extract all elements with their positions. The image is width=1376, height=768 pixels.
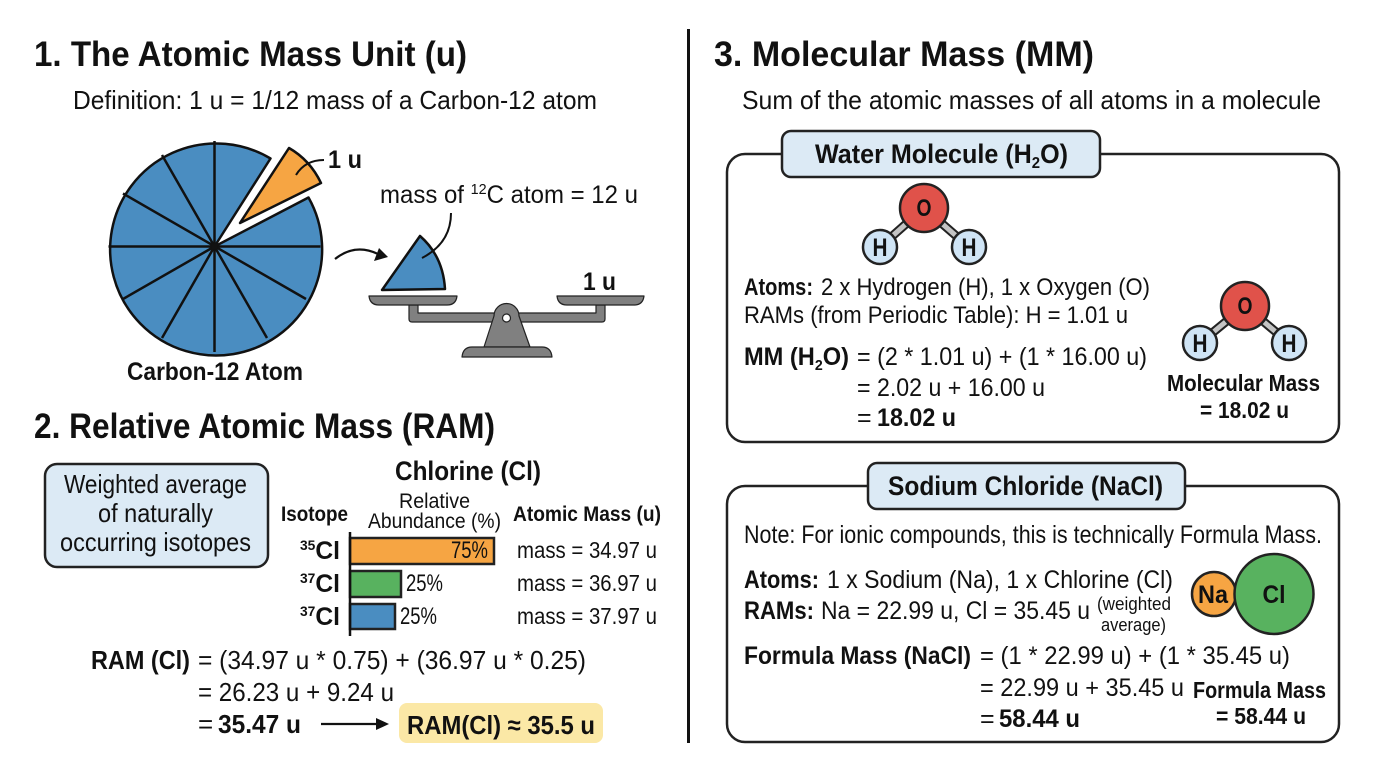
arrow: to result [321, 718, 389, 730]
callout: weighted average: occurring isotopes [60, 527, 251, 557]
icon: slice on scale [382, 236, 445, 290]
formula: molecular mass of water: = 2.02 u + 16.00 u [857, 374, 1045, 402]
leader line: mass label [422, 213, 451, 258]
callout: RAM result: RAM(Cl) ≈ 35.5 u [407, 710, 595, 740]
formula: formula mass of NaCl [744, 642, 1290, 733]
icon: water molecule right: H [1192, 330, 1208, 358]
leader line: 1 u [296, 160, 324, 175]
chart: carbon-12 pie [108, 141, 322, 355]
panel heading: NaCl: Sodium Chloride (NaCl) [888, 471, 1163, 501]
heading: Chlorine: Chlorine (Cl) [395, 456, 541, 486]
panel heading: water [782, 131, 1100, 177]
formula: molecular mass of water: 18.02 u [877, 404, 956, 432]
callout: weighted average: Weighted average [64, 469, 247, 499]
text: atoms and RAMs: 2 x Hydrogen (H), 1 x Oxygen (O) [821, 274, 1150, 301]
text: atoms and RAMs: RAMs (from Periodic Table): H = 1.01 u [744, 302, 1128, 329]
text: atoms and RAMs: RAMs: [744, 597, 814, 625]
text: atoms and RAMs: Atoms: [744, 566, 819, 594]
icon: NaCl ions: Na [1198, 581, 1229, 609]
heading: section 1: 1. The Atomic Mass Unit (u) [34, 35, 467, 74]
text: atoms and RAMs: Na = 22.99 u, Cl = 35.45 u [821, 597, 1090, 625]
formula: RAM calculation: 35.47 u [218, 709, 301, 739]
icon: water molecule right: H [1282, 330, 1296, 358]
panel heading: water: O) [1040, 139, 1068, 169]
bar chart: isotope abundance: 25% [406, 570, 443, 597]
text: atoms and RAMs: 1 x Sodium (Na), 1 x Chlorine (Cl) [827, 566, 1173, 594]
label: molecular mass result: = 18.02 u [1200, 397, 1289, 423]
formula: formula mass of NaCl: = (1 * 22.99 u) + (1 * 35.45 u) [980, 642, 1290, 670]
column header: relative abundance: Relative [399, 490, 470, 513]
panel heading: water: Water Molecule (H [815, 139, 1048, 169]
atomic mass values: mass = 36.97 u [517, 570, 657, 596]
formula: molecular mass of water: O) [823, 343, 849, 371]
formula: formula mass of NaCl: = 22.99 u + 35.45 u [980, 674, 1184, 702]
bar chart: isotope abundance: 75% [451, 537, 488, 564]
callout: weighted average [45, 464, 268, 567]
subtitle text: Sum of the atomic masses of all atoms in a molecule [742, 85, 1321, 115]
icon: water molecule top [863, 184, 986, 264]
callout: RAM result [399, 703, 603, 743]
heading: section 2: 2. Relative Atomic Mass (RAM) [34, 407, 495, 446]
panel: sodium chloride [727, 463, 1339, 742]
icon: NaCl ions: Cl [1262, 581, 1286, 609]
formula: RAM calculation: RAM (Cl) [91, 645, 190, 675]
label: formula mass result: Formula Mass [1193, 677, 1326, 703]
isotope labels: Cl [315, 537, 340, 565]
isotope labels: 37 [300, 603, 316, 619]
isotope labels: Cl [315, 603, 340, 631]
panel heading: NaCl [868, 463, 1185, 509]
formula: molecular mass of water [744, 343, 1147, 432]
panel: water molecule [727, 131, 1339, 442]
label: mass of carbon-12: 12 [471, 181, 487, 198]
callout: weighted average: of naturally [98, 498, 213, 528]
isotope labels [300, 537, 340, 631]
formula: RAM calculation: = (34.97 u * 0.75) + (36.97 u * 0.25) [198, 645, 586, 675]
column header: relative abundance: Abundance (%) [368, 510, 501, 533]
text: atoms and RAMs [744, 274, 1150, 329]
text: atoms and RAMs: Atoms: [744, 274, 813, 301]
formula: formula mass of NaCl: Formula Mass (NaCl) [744, 642, 971, 670]
label: 1 u on slice: 1 u [328, 146, 362, 174]
icon: water molecule top: O [916, 195, 932, 222]
isotope labels: 35 [300, 537, 316, 553]
formula: RAM calculation: = 26.23 u + 9.24 u [198, 677, 394, 707]
formula: molecular mass of water: 2 [815, 357, 823, 374]
formula: molecular mass of water: = (2 * 1.01 u) + (1 * 16.00 u) [857, 343, 1147, 371]
arrow: slice to scale [335, 248, 388, 261]
column header: atomic mass: Atomic Mass (u) [513, 503, 661, 526]
label: molecular mass result [1167, 370, 1320, 423]
panel heading: water: 2 [1032, 155, 1040, 172]
heading: section 3: 3. Molecular Mass (MM) [714, 35, 1094, 74]
label: formula mass result [1193, 677, 1326, 729]
atomic mass values [517, 537, 657, 629]
formula: RAM calculation [91, 645, 586, 739]
icon: water molecule right: O [1238, 293, 1252, 320]
isotope labels: 37 [300, 570, 316, 586]
icon: water molecule top: H [872, 234, 888, 262]
definition text: Definition: 1 u = 1/12 mass of a Carbon-12 atom [73, 85, 597, 115]
isotope labels: Cl [315, 570, 340, 598]
bar chart: isotope abundance [350, 532, 494, 636]
icon: water molecule right [1183, 282, 1306, 360]
column header: relative abundance [368, 490, 501, 533]
label: mass of carbon-12: C atom = 12 u [487, 181, 638, 209]
label: molecular mass result: Molecular Mass [1167, 370, 1320, 396]
formula: formula mass of NaCl: = [980, 705, 995, 733]
formula: RAM calculation: = [198, 709, 213, 739]
label: Carbon-12 Atom: Carbon-12 Atom [127, 358, 303, 386]
label: 1 u on scale: 1 u [583, 268, 616, 296]
column header: isotope: Isotope [281, 503, 348, 526]
atomic mass values: mass = 37.97 u [517, 603, 657, 629]
formula: formula mass of NaCl: 58.44 u [999, 705, 1080, 733]
label: formula mass result: = 58.44 u [1216, 703, 1306, 729]
text: atoms and RAMs: average) [1101, 615, 1166, 635]
label: mass of carbon-12: mass of [380, 181, 468, 209]
icon: balance scale [369, 296, 644, 357]
text: atoms and RAMs [744, 566, 1173, 635]
formula: molecular mass of water: = [857, 404, 872, 432]
formula: molecular mass of water: MM (H [744, 343, 819, 371]
text: atoms and RAMs: (weighted [1097, 594, 1171, 614]
icon: orange 1 u slice [240, 148, 321, 223]
atomic mass values: mass = 34.97 u [517, 537, 657, 563]
bar chart: isotope abundance: 25% [400, 603, 437, 630]
icon: NaCl ions [1192, 554, 1314, 634]
divider [687, 29, 690, 743]
icon: water molecule top: H [962, 234, 976, 262]
